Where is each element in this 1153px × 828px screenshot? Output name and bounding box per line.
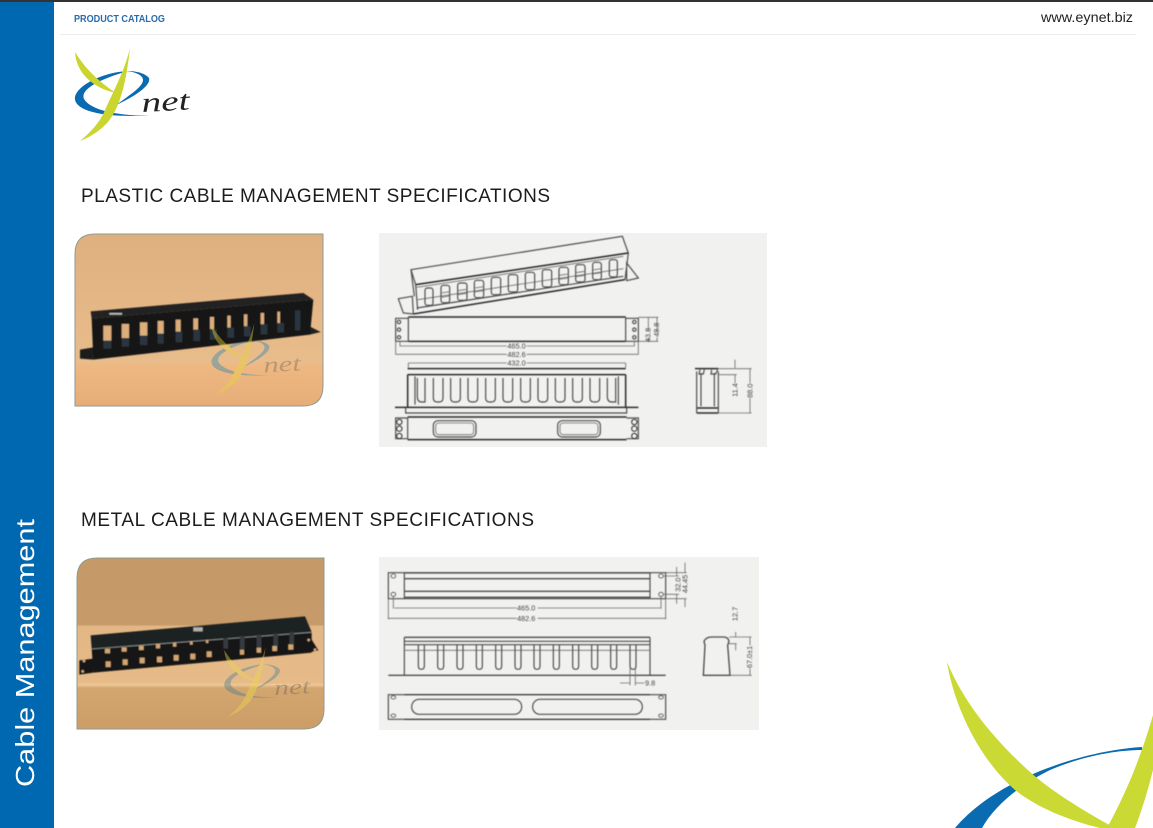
technical drawing: metal cable manager (379, 557, 759, 730)
sidebar (0, 2, 54, 828)
top view with dimensions: 44.45 (680, 575, 689, 593)
front view with dimensions: 432.0 (507, 359, 526, 368)
sidebar title: Cable Management (10, 518, 40, 787)
side profile with dimensions: 67.0±1 (745, 646, 754, 668)
decorative corner logo (947, 662, 1153, 828)
slotted view: 9.8 (645, 679, 655, 688)
front view with dimensions: 465.0 (507, 342, 526, 351)
side profile with dimensions: 12.7 (731, 607, 740, 621)
front view with dimensions: 43.8 (643, 328, 652, 342)
photo: plastic cable manager (75, 234, 323, 406)
top view with dimensions (388, 563, 689, 623)
logo: eynet (75, 48, 192, 141)
front view with dimensions: 482.6 (507, 350, 526, 359)
header label: product catalog: PRODUCT CATALOG (74, 14, 165, 25)
top view with dimensions: 465.0 (517, 604, 535, 613)
top view with dimensions: 482.6 (517, 614, 535, 623)
isometric view (398, 236, 638, 314)
side view with dimensions (695, 360, 755, 413)
heading: metal cable management: METAL CABLE MANAGEMENT SPECIFICATIONS (81, 510, 534, 531)
watermark logo on photo: net (274, 674, 312, 700)
technical drawing: plastic cable manager (379, 233, 767, 447)
bottom view (396, 417, 638, 440)
watermark logo on photo (224, 647, 312, 717)
slotted view (395, 369, 638, 413)
watermark logo on photo: net (263, 351, 303, 377)
front view with dimensions (396, 317, 661, 368)
photo: metal cable manager (77, 558, 324, 729)
front view with dimensions: 48.8 (652, 323, 661, 337)
top dark bar (0, 0, 1153, 2)
bottom view (388, 695, 666, 719)
side profile with dimensions (703, 607, 754, 675)
watermark logo on photo (211, 322, 303, 395)
logo: eynet: net (141, 85, 192, 119)
heading: plastic cable management: PLASTIC CABLE MANAGEMENT SPECIFICATIONS (81, 186, 550, 207)
slotted view (388, 637, 666, 688)
header website: www.eynet.biz (1040, 9, 1133, 25)
side view with dimensions: 11.4 (730, 383, 739, 397)
side view with dimensions: 88.0 (746, 384, 755, 398)
top view with dimensions: 32.0 (674, 578, 683, 592)
